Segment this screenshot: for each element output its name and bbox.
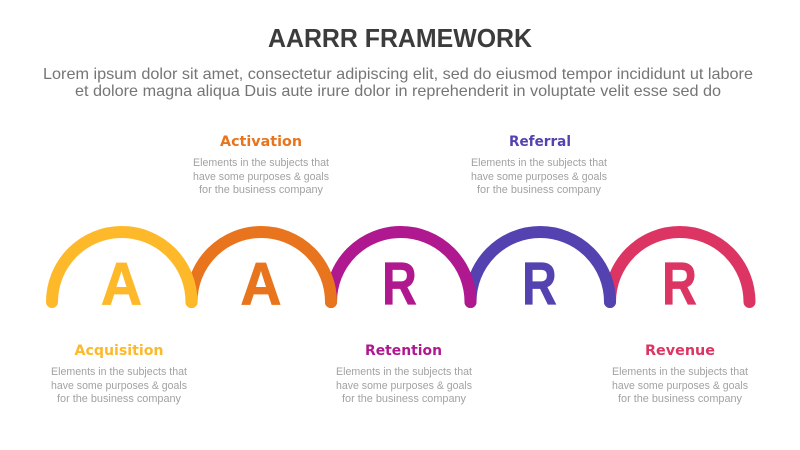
block: revenue: Revenue <box>645 343 715 359</box>
intro text: et dolore magna aliqua Duis aute irure dolor in reprehenderit in voluptate velit esse sed do <box>75 83 721 100</box>
block: referral <box>471 134 607 196</box>
block: revenue: Elements in the subjects that <box>612 366 748 378</box>
arc: retention <box>331 232 470 302</box>
block: activation: Activation <box>220 134 302 150</box>
intro text: Lorem ipsum dolor sit amet, consectetur adipiscing elit, sed do eiusmod tempor incididunt ut labore <box>43 66 753 83</box>
block: acquisition: have some purposes & goals <box>51 380 187 392</box>
block: activation: for the business company <box>199 184 323 196</box>
arc: acquisition <box>52 232 192 302</box>
letter: R: R <box>522 250 557 318</box>
block: retention: Elements in the subjects that <box>336 366 472 378</box>
block: revenue <box>612 343 748 405</box>
letter: R: R <box>382 250 417 318</box>
block: acquisition <box>51 343 187 405</box>
intro text <box>43 66 753 100</box>
block: acquisition: Acquisition <box>74 343 164 359</box>
letter: A: A <box>240 251 282 318</box>
block: referral: Referral <box>509 134 571 150</box>
block: acquisition: Elements in the subjects that <box>51 366 187 378</box>
arc: activation <box>192 232 331 302</box>
block: referral: have some purposes & goals <box>471 171 607 183</box>
block: retention: for the business company <box>342 393 466 405</box>
block: revenue: have some purposes & goals <box>612 380 748 392</box>
block: retention <box>336 343 472 405</box>
letter: A: A <box>101 251 142 318</box>
block: activation <box>193 134 329 196</box>
arc: referral <box>470 232 610 302</box>
title: AARRR FRAMEWORK <box>268 23 532 53</box>
letter: R: R <box>662 250 697 318</box>
block: referral: Elements in the subjects that <box>471 157 607 169</box>
block: retention: Retention <box>365 343 442 359</box>
block: acquisition: for the business company <box>57 393 181 405</box>
arc: revenue <box>610 232 750 302</box>
block: referral: for the business company <box>477 184 601 196</box>
block: activation: have some purposes & goals <box>193 171 329 183</box>
block: retention: have some purposes & goals <box>336 380 472 392</box>
block: revenue: for the business company <box>618 393 742 405</box>
block: activation: Elements in the subjects that <box>193 157 329 169</box>
